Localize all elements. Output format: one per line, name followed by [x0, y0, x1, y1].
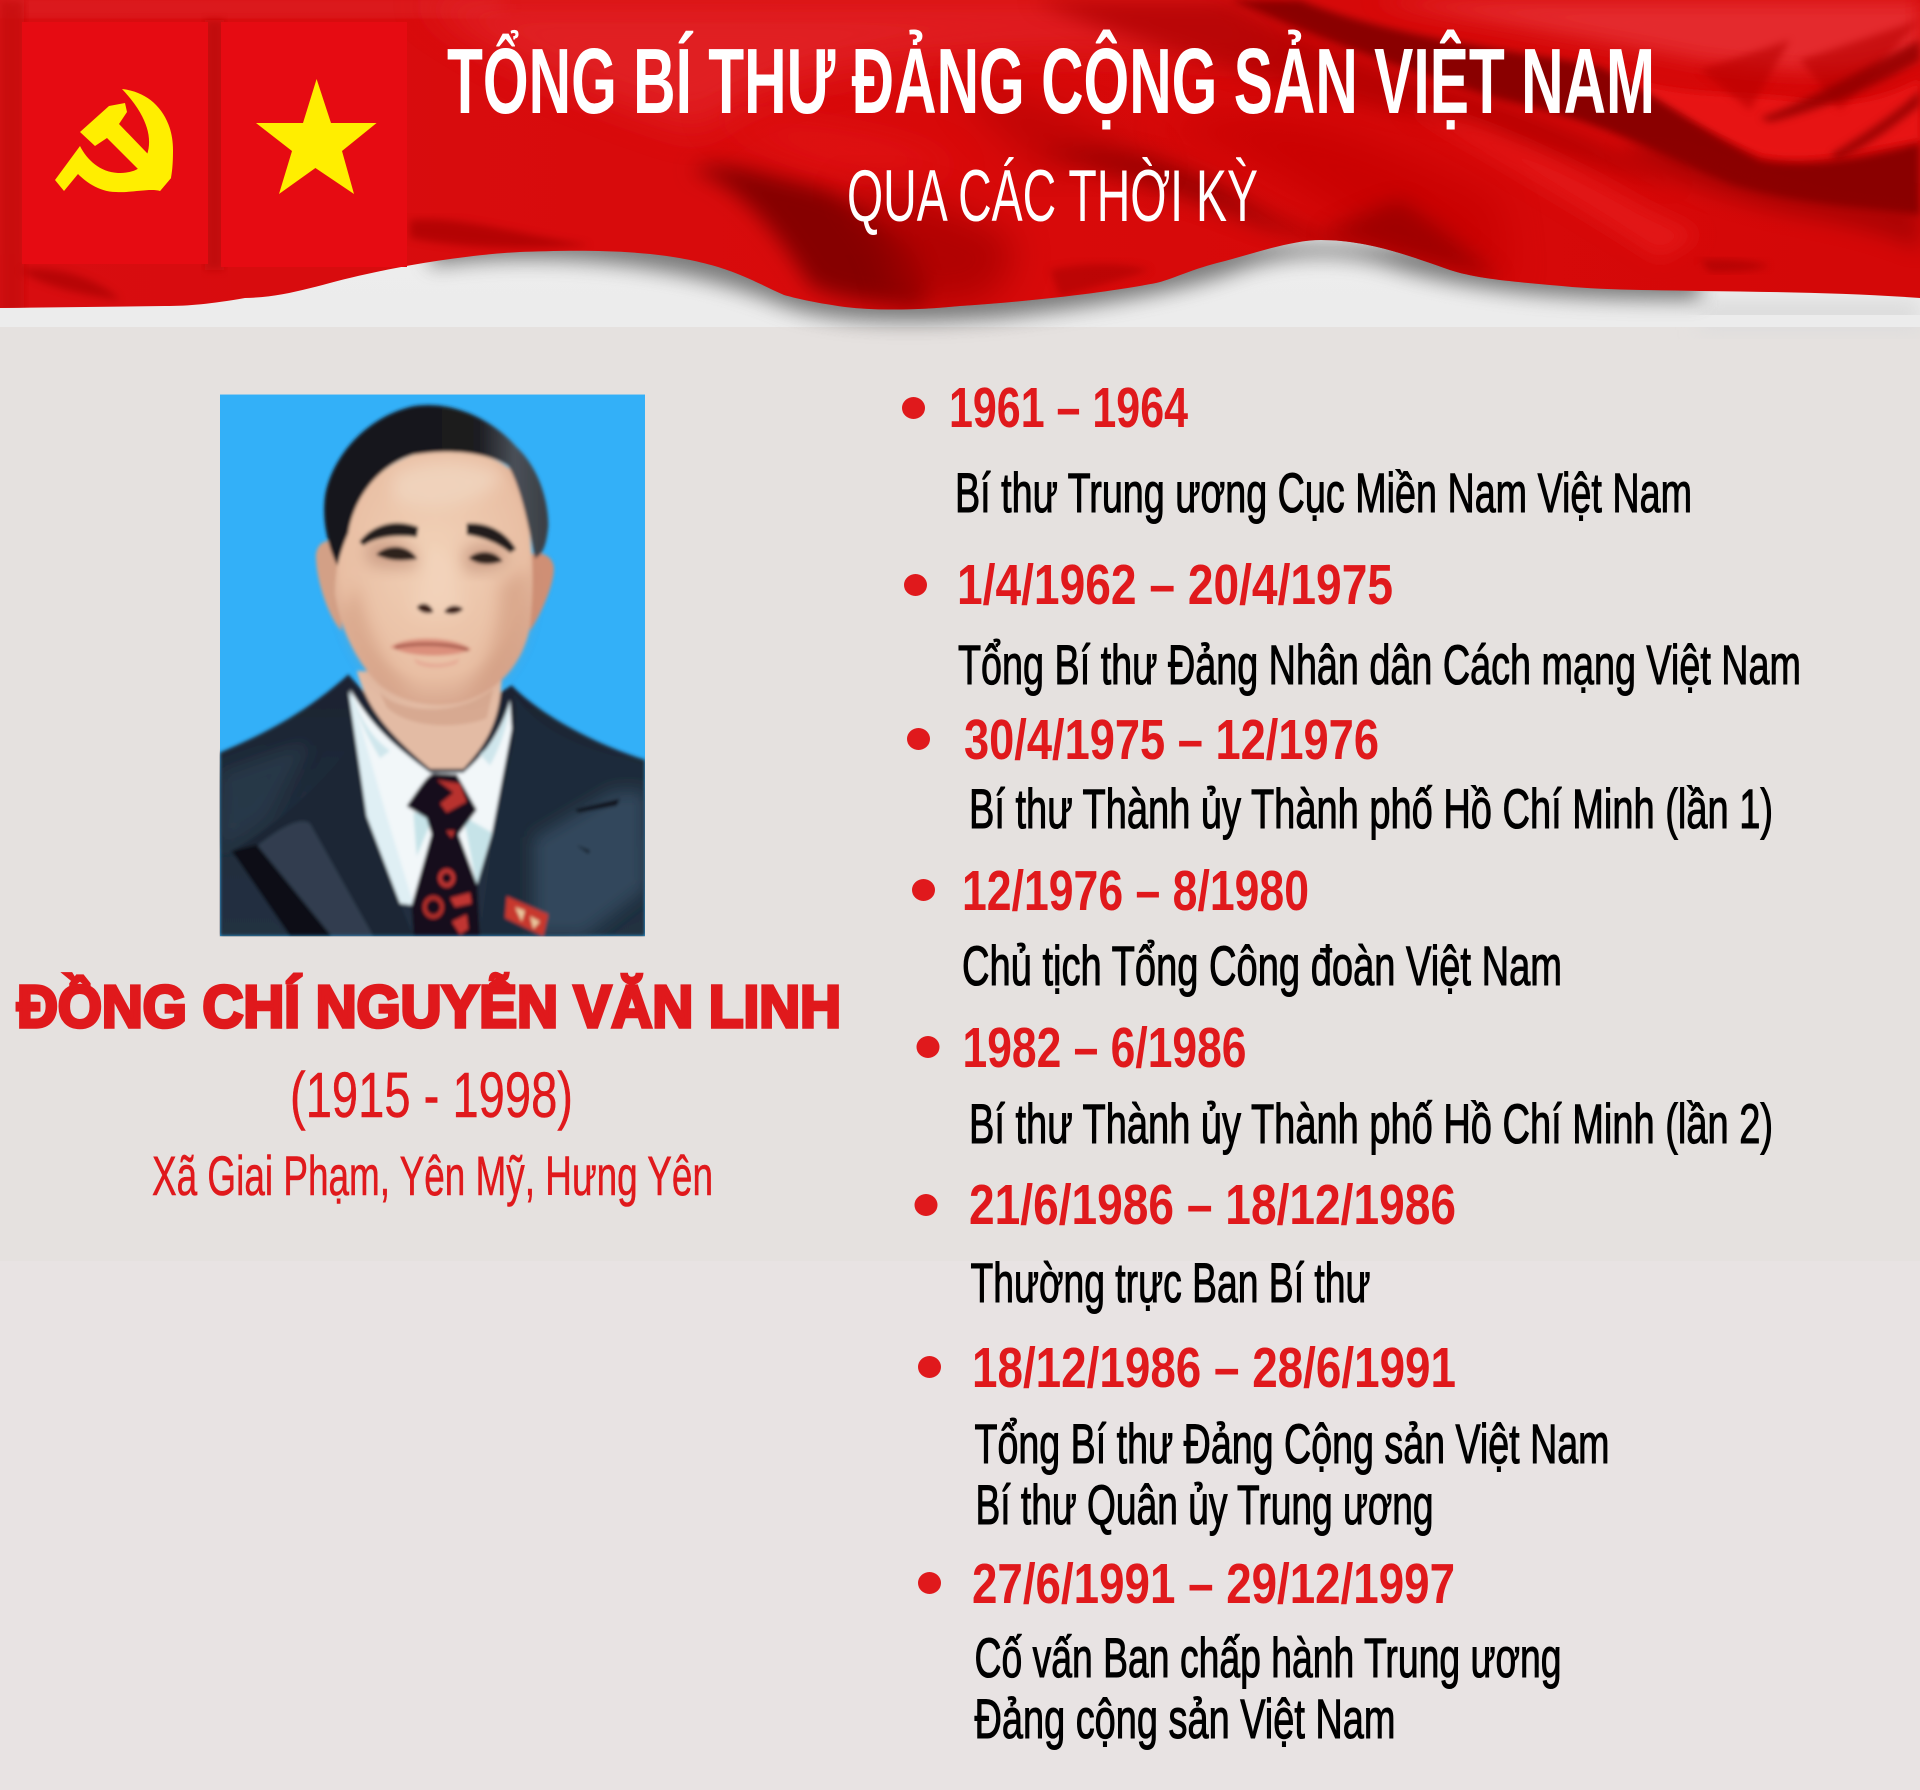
- timeline entry 3: [907, 708, 1773, 840]
- timeline entry 1: [902, 376, 1692, 524]
- role line 1: Cố vấn Ban chấp hành Trung ương: [974, 1626, 1562, 1689]
- header banner: red waving flag: [0, 0, 1920, 330]
- role: Chủ tịch Tổng Công đoàn Việt Nam: [962, 934, 1562, 997]
- eyebrows: [359, 523, 516, 553]
- hair: [324, 405, 548, 565]
- portrait photo: [220, 395, 645, 936]
- timeline entry 4: [912, 859, 1562, 997]
- timeline entry 5: [916, 1016, 1773, 1155]
- neck: [357, 671, 502, 769]
- bullet: [907, 728, 930, 750]
- tie: [407, 773, 480, 936]
- bullet: [902, 397, 925, 419]
- bullet: [918, 1356, 941, 1378]
- dates: 18/12/1986 – 28/6/1991: [972, 1336, 1456, 1400]
- dates: 1/4/1962 – 20/4/1975: [957, 553, 1393, 617]
- shirt: [348, 691, 413, 905]
- dates: 21/6/1986 – 18/12/1986: [969, 1173, 1456, 1237]
- bullet: [914, 1194, 938, 1216]
- icon: star: [256, 79, 377, 194]
- mouth: [390, 639, 472, 656]
- timeline entry 2: [904, 553, 1801, 696]
- leader name: ĐỒNG CHÍ NGUYỄN VĂN LINH: [17, 973, 841, 1040]
- birthplace: Xã Giai Phạm, Yên Mỹ, Hưng Yên: [152, 1144, 713, 1207]
- bullet: [916, 1036, 940, 1058]
- suit: [220, 674, 645, 936]
- subtitle: QUA CÁC THỜI KỲ: [847, 156, 1258, 237]
- role line 2: Đảng cộng sản Việt Nam: [974, 1687, 1396, 1750]
- dates: 12/1976 – 8/1980: [962, 859, 1309, 923]
- bullet: [918, 1572, 941, 1594]
- timeline entry 7: [918, 1336, 1610, 1536]
- timeline entry 8: [918, 1552, 1562, 1750]
- bullet: [912, 879, 935, 901]
- national flag: yellow star: [221, 22, 407, 267]
- bullet: [904, 574, 927, 596]
- face: [335, 451, 533, 705]
- role: Thường trực Ban Bí thư: [970, 1251, 1370, 1314]
- face shading: [343, 569, 528, 696]
- dates: 30/4/1975 – 12/1976: [964, 708, 1379, 772]
- nose: [428, 596, 451, 606]
- icon: hammer and sickle: [55, 89, 173, 192]
- badge: [505, 896, 548, 936]
- dates: 1982 – 6/1986: [962, 1016, 1246, 1080]
- role line 2: Bí thư Quân ủy Trung ương: [976, 1473, 1434, 1536]
- eyes: [376, 547, 503, 564]
- dates: 1961 – 1964: [949, 376, 1188, 440]
- ears: [316, 541, 342, 631]
- life years: (1915 - 1998): [290, 1059, 573, 1131]
- dates: 27/6/1991 – 29/12/1997: [972, 1552, 1455, 1616]
- party flag: hammer and sickle: [22, 22, 208, 264]
- timeline entry 6: [914, 1173, 1456, 1314]
- role line 1: Tổng Bí thư Đảng Cộng sản Việt Nam: [974, 1412, 1610, 1475]
